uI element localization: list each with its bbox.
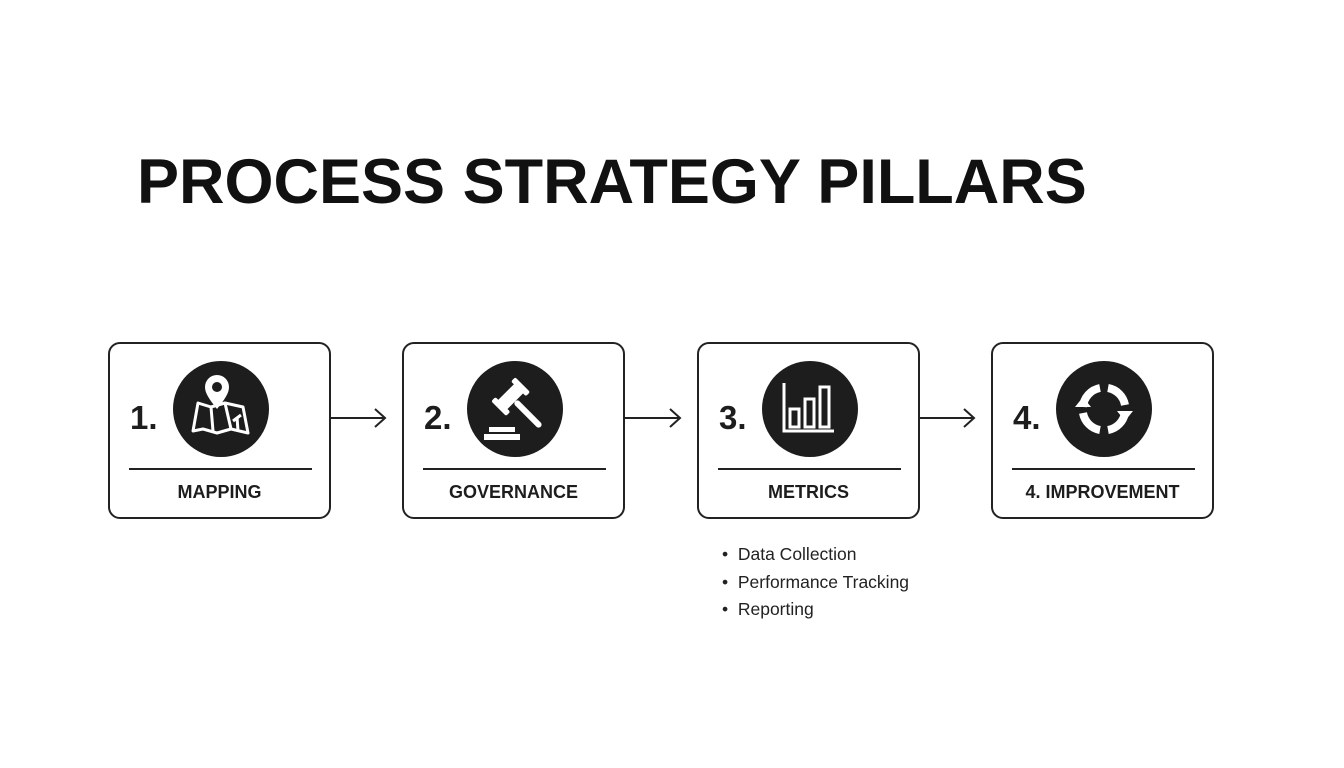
arrow 3 xyxy=(920,408,976,428)
panel: governance xyxy=(402,342,625,519)
icon: bar chart xyxy=(762,361,858,457)
label: mapping: MAPPING xyxy=(177,482,262,502)
title: PROCESS STRATEGY PILLARS xyxy=(137,147,1087,217)
bullet list: metrics details: • Data Collection xyxy=(722,544,857,564)
arrow 2 xyxy=(625,408,682,428)
number 4: 4. xyxy=(1013,399,1041,436)
bullet list: metrics details xyxy=(722,544,909,619)
panel: metrics xyxy=(697,342,920,519)
icon: map pin xyxy=(173,361,269,457)
label: metrics: METRICS xyxy=(768,482,849,502)
bullet list: metrics details: • Performance Tracking xyxy=(722,572,909,592)
number 2: 2. xyxy=(424,399,452,436)
number 1: 1. xyxy=(130,399,158,436)
panel: mapping xyxy=(108,342,331,519)
number 3: 3. xyxy=(719,399,747,436)
panel: improvement xyxy=(991,342,1214,519)
bullet list: metrics details: • Reporting xyxy=(722,599,814,619)
label: governance: GOVERNANCE xyxy=(449,482,578,502)
arrow 1 xyxy=(331,408,386,428)
icon: gavel xyxy=(467,361,563,457)
label: improvement: 4. IMPROVEMENT xyxy=(1025,482,1180,502)
icon: cycle arrows xyxy=(1056,361,1152,457)
